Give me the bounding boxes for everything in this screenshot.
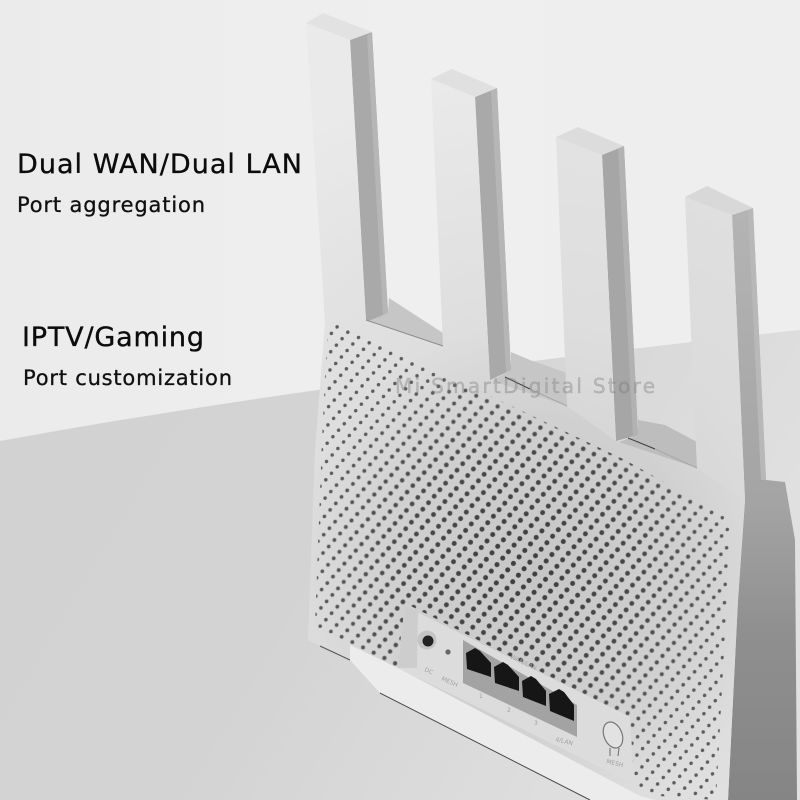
antenna side faces [350,32,766,480]
text: Port aggregation: Port aggregation [17,193,205,217]
ethernet port frame [463,640,577,737]
port labels: MESH [440,675,459,689]
port labels: 3 [534,720,538,727]
table surface [0,330,800,800]
ethernet port 3 [522,676,546,706]
router rear side [728,208,797,800]
white router base [350,645,655,800]
heading: IPTV/Gaming: IPTV/Gaming [22,322,204,353]
text: Port customization: Port customization [23,366,232,390]
panel left bevel [398,606,418,668]
ethernet port 1 [466,648,491,677]
power jack [418,630,436,650]
port labels: 1 [479,693,483,700]
ethernet port 4 [549,689,574,721]
body top bevel lines [366,320,697,468]
ethernet port 2 [494,662,519,691]
port labels: MESH [606,758,624,769]
port labels: 4/LAN [555,736,574,747]
port labels [423,654,624,769]
heading: Dual WAN/Dual LAN: Dual WAN/Dual LAN [17,149,302,180]
status LED [445,649,451,655]
shadows seen through the antenna gaps [366,298,697,470]
port labels: 2 [507,707,511,714]
base shadow line [380,693,590,800]
perforated speaker dots [315,322,731,800]
port labels: DC [423,666,434,676]
table contact line [320,646,350,660]
port panel [398,606,634,784]
antenna top caps [306,13,753,215]
router front body with antennas [306,23,745,800]
port labels: WAN/LAN [509,654,538,672]
mesh button [600,719,626,756]
watermark: Mi SmartDigital Store [395,374,655,398]
